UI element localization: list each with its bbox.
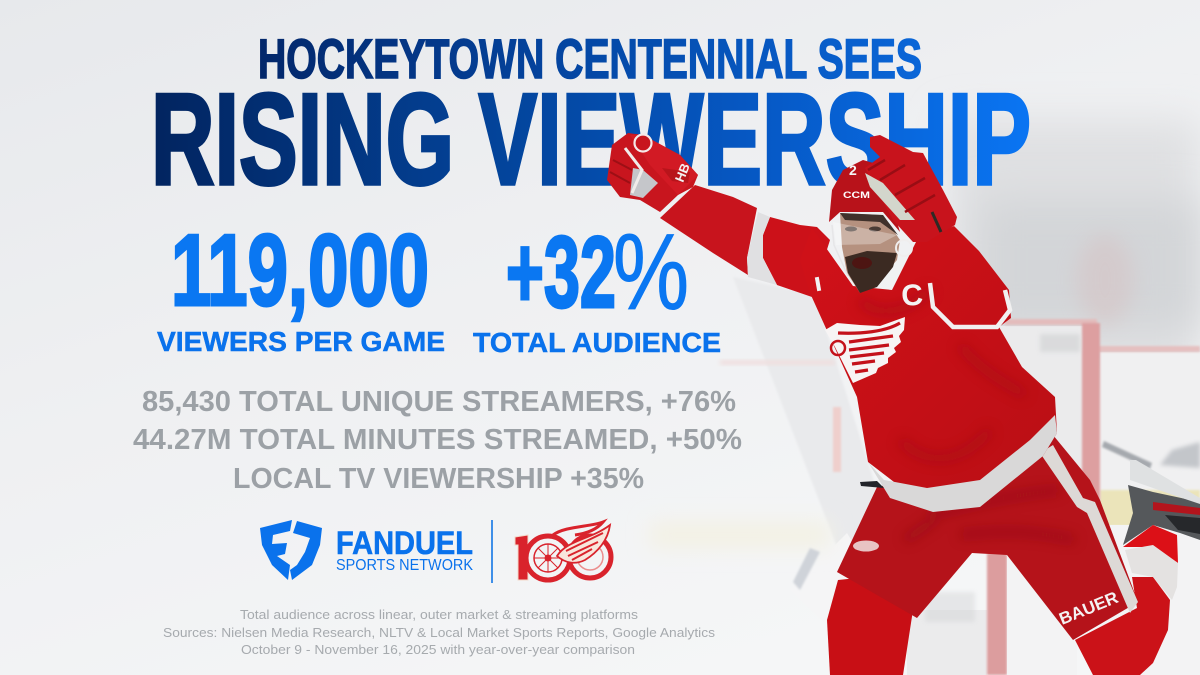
forearm sleeve xyxy=(660,185,757,275)
bauer wordmark: BAUER xyxy=(1056,588,1121,629)
helmet xyxy=(829,160,900,232)
face xyxy=(840,213,900,293)
blurred arena backdrop xyxy=(650,120,1200,675)
stat: total audience xyxy=(473,211,721,358)
captain letter: C xyxy=(900,279,924,313)
fold shading xyxy=(860,290,1025,458)
pants stripe xyxy=(1040,445,1138,613)
sleeve stripe xyxy=(747,212,777,285)
left leg xyxy=(827,577,913,675)
right leg xyxy=(1075,577,1170,675)
sports network wordmark: SPORTS NETWORK xyxy=(336,557,473,574)
icon: red wings 100 logo xyxy=(515,522,611,580)
stat: total audience: +32 xyxy=(506,217,616,329)
streaming stats xyxy=(133,386,742,495)
stat: total audience: % xyxy=(613,211,689,332)
stat line: minutes: 44.27M TOTAL MINUTES STREAMED, +50% xyxy=(133,424,742,456)
upper arm xyxy=(763,217,830,297)
footnote line 1: Total audience across linear, outer market & streaming platforms xyxy=(240,607,639,622)
jersey hem band xyxy=(868,415,1057,512)
fanduel wordmark: FANDUEL xyxy=(336,525,473,561)
shin sock xyxy=(1123,525,1178,563)
stat line: streamers: 85,430 TOTAL UNIQUE STREAMERS, +76% xyxy=(142,386,736,418)
arm and jersey xyxy=(660,185,1057,512)
jersey belt tab xyxy=(860,481,884,488)
stat: viewers per game: VIEWERS PER GAME xyxy=(157,326,445,357)
jersey brand mark xyxy=(815,277,821,291)
logo divider xyxy=(491,520,493,583)
pants xyxy=(837,435,1138,640)
helmet number: 2 xyxy=(849,162,857,178)
footnote line 2: Sources: Nielsen Media Research, NLTV & Local Market Sports Reports, Google Analytics xyxy=(163,625,716,640)
stat block xyxy=(157,211,721,358)
skate xyxy=(1123,460,1200,545)
helmet brand: CCM xyxy=(843,190,870,201)
eyes xyxy=(845,226,857,232)
ear guard xyxy=(896,240,912,256)
footnote xyxy=(163,607,716,657)
goal and boards xyxy=(1000,326,1090,511)
logos xyxy=(260,520,611,583)
title xyxy=(151,27,1031,212)
stat line: local tv: LOCAL TV VIEWERSHIP +35% xyxy=(233,463,644,495)
player illustration xyxy=(607,133,1200,675)
title line 1: HOCKEYTOWN CENTENNIAL SEES xyxy=(258,27,922,90)
jersey body xyxy=(800,226,1057,512)
footnote line 3: October 9 - November 16, 2025 with year-over-year comparison xyxy=(241,642,635,657)
shoulder stripe xyxy=(930,283,1010,327)
hair xyxy=(840,213,898,235)
mouth xyxy=(852,257,872,269)
winged wheel crest xyxy=(825,317,905,383)
icon: fanduel shield xyxy=(260,520,322,580)
stat: total audience: TOTAL AUDIENCE xyxy=(473,327,721,358)
stat: viewers per game: 119,000 xyxy=(171,215,429,327)
visor xyxy=(833,222,897,245)
beard xyxy=(845,251,897,293)
glove brand: HB xyxy=(672,161,693,184)
right glove xyxy=(865,135,957,242)
pants crest xyxy=(853,540,879,552)
stat: viewers per game xyxy=(157,215,445,357)
head and helmet xyxy=(829,160,912,293)
left glove xyxy=(607,133,698,212)
